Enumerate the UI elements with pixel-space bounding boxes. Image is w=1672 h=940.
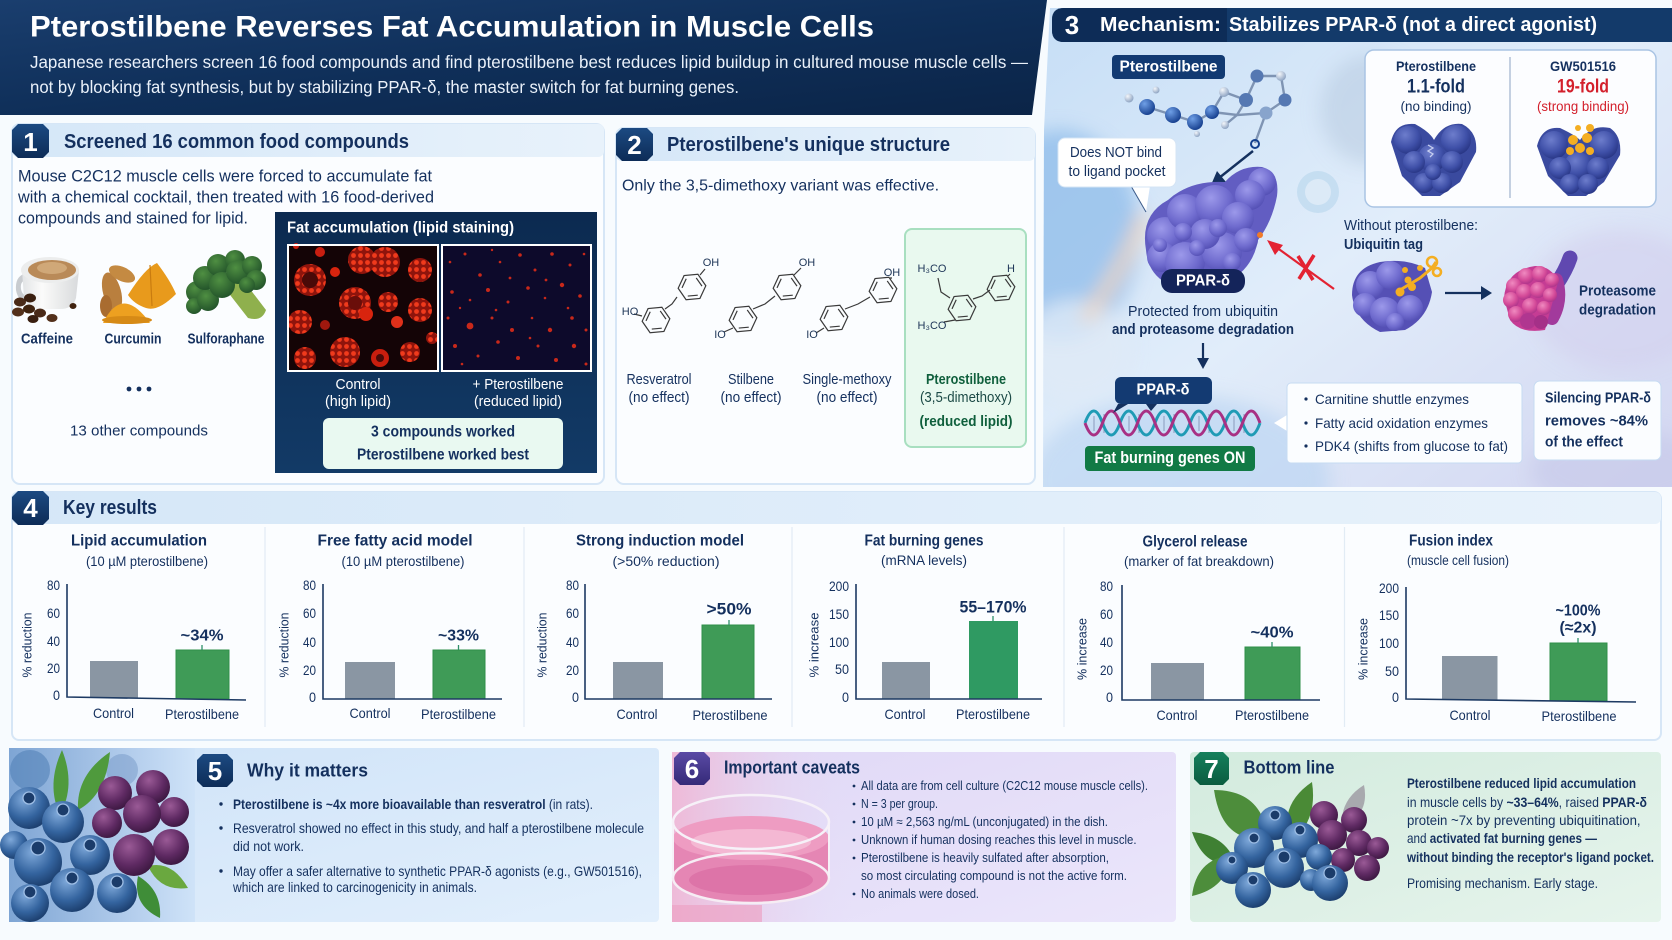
summary text [1406,775,1654,891]
protection caption: Protected from ubiquitin [1128,304,1278,320]
proteasome [1503,258,1570,331]
protein: strong binding [1537,124,1620,196]
GW501516 binding: 19-fold [1557,76,1609,98]
GW501516 binding [1537,58,1629,114]
chart: fat burning genes: % increase [806,612,822,678]
PPAR-delta gene tag [1113,377,1212,413]
arrow: to protein [1211,151,1253,185]
label: control: (high lipid) [325,394,391,410]
chart: fat burning genes: 50 [835,661,849,677]
label: resveratrol [626,372,692,406]
caveat list: 10 µM ≈ 2,563 ng/mL (unconjugated) in the dish. [861,815,1108,829]
summary text: and activated fat burning genes — [1407,830,1597,846]
label: pterostilbene: (reduced lipid) [920,414,1013,430]
chart: strong induction model: % reduction [534,612,550,678]
bullet list: which are linked to carcinogenicity in animals. [232,879,477,895]
panel 4: key results [12,491,1661,740]
chart: glycerol release [1074,534,1320,723]
icon: broccoli [186,250,266,319]
label: pterostilbene: (3,5-dimethoxy) [920,390,1012,406]
chart: glycerol release: 40 [1100,634,1113,650]
chart: fat burning genes: 200 [829,578,849,594]
panel 3: mechanism [980,8,1672,565]
chart: fat burning genes: 100 [829,634,849,650]
molecule: resveratrol: OH [703,257,719,269]
label: stilbene: (no effect) [720,390,782,406]
target gene list: PDK4 (shifts from glucose to fat) [1315,438,1508,454]
heading 3: Mechanism: [1100,14,1221,36]
lipid staining panel [275,212,597,473]
label: curcumin: Curcumin [104,330,162,348]
chart: glycerol release: 0 [1106,689,1113,705]
chart: glycerol release: Pterostilbene [1235,707,1309,723]
silencing callout: Silencing PPAR-δ [1545,390,1651,406]
silencing callout [1534,381,1661,460]
chart: fusion index: Fusion index [1409,532,1493,550]
caveat list: Unknown if human dosing reaches this level in muscle. [861,833,1136,847]
chart: fusion index [1356,532,1636,724]
intro text [17,166,434,228]
panel 3 header [1052,8,1672,42]
panel 6: caveats [672,752,1176,922]
protein: ubiquitin tagged [1352,257,1441,332]
pterostilbene tag: Pterostilbene [1120,58,1218,76]
chart: glycerol release: (marker of fat breakdown) [1124,553,1274,569]
label: control: Control [336,377,380,393]
chart: strong induction model: Pterostilbene [692,707,768,723]
protein: PPAR-delta [1145,167,1277,287]
protection caption: and proteasome degradation [1112,322,1294,338]
chart: fusion index: (muscle cell fusion) [1407,552,1509,568]
label: resveratrol: Resveratrol [626,372,692,388]
photo: culture dish [672,752,852,922]
chart: free fatty acid model: 60 [303,605,316,621]
GW501516 binding: (strong binding) [1537,98,1629,114]
pterostilbene tag [1112,55,1225,79]
badge 3: 3 [1065,10,1079,40]
header banner [0,0,1047,115]
callout: does not bind [1058,138,1176,212]
badge 1: 1 [23,127,38,157]
chart: fusion index: 200 [1379,580,1399,596]
chart: fat burning genes: 0 [842,689,849,705]
arrow: to proteasome [1445,286,1492,300]
molecule: stilbene [714,257,815,341]
subtitle: Japanese researchers screen 16 food compounds and find pterostilbene best reduces lipid buildup in cultured mouse muscle cells — [30,52,1028,72]
chart: glycerol release: 60 [1100,606,1113,622]
proteasome label [1579,282,1656,318]
molecule: single-methoxy: OH [884,267,900,279]
arrow: down to DNA [1197,343,1209,369]
chart: free fatty acid model: Free fatty acid model [318,532,472,550]
GW501516 binding: GW501516 [1550,58,1616,74]
heading 1: Screened 16 common food compounds [64,131,409,153]
badge 2: 2 [627,130,642,160]
chart: fat burning genes: 55–170% [960,598,1026,616]
binding comparison box [1365,50,1656,207]
fat burning genes label [1085,446,1255,471]
chart: strong induction model: >50% [706,600,752,618]
summary text: protein ~7x by preventing ubiquitination, [1407,812,1641,828]
arrow: blocked ubiquitination [1267,240,1334,289]
intro text: with a chemical cocktail, then treated with 16 food-derived [17,188,434,206]
PPAR-delta label: PPAR-δ [1176,272,1230,290]
panel 7: bottom line [1190,752,1661,922]
label: single-methoxy [802,372,892,406]
chart: lipid accumulation: Control [93,705,134,721]
chart: glycerol release: ~40% [1250,624,1294,642]
bullet list: did not work. [233,838,304,854]
without pterostilbene text [1344,218,1478,253]
molecule: pterostilbene: H [1007,263,1015,275]
summary text: Promising mechanism. Early stage. [1407,875,1598,891]
chart: strong induction model [534,532,772,723]
heading 5: Why it matters [247,760,368,780]
badge 7 [1194,752,1229,785]
label: single-methoxy: (no effect) [816,390,878,406]
lipid panel title: Fat accumulation (lipid staining) [287,220,514,236]
icon: coffee [12,257,79,323]
badge 5: 5 [208,756,222,786]
photo: berries [1192,782,1389,908]
ellipsis dots [127,387,151,391]
pterostilbene molecule model [1124,70,1292,148]
badge 4: 4 [23,493,38,523]
chart: fusion index: % increase [1356,618,1370,680]
intro text: Mouse C2C12 muscle cells were forced to accumulate fat [18,166,432,186]
molecule: single-methoxy [806,267,900,341]
caveat list: so most circulating compound is not the active form. [861,869,1127,883]
subtitle [30,52,1028,97]
photo: blueberries and grapes [0,748,195,922]
panel 1: screened compounds [12,124,604,484]
heading 3: Stabilizes PPAR-δ (not a direct agonist) [1229,14,1597,36]
chart: fat burning genes: 150 [829,606,849,622]
label: pterostilbene treated [472,377,564,410]
chart: glycerol release: 20 [1100,662,1113,678]
heading 6: Important caveats [724,756,860,778]
proteasome label: Proteasome [1579,282,1656,300]
bullet list: May offer a safer alternative to synthetic PPAR-δ agonists (e.g., GW501516), [233,863,642,879]
chart: lipid accumulation: (10 µM pterostilbene) [86,553,208,569]
chart: lipid accumulation: 0 [53,687,60,703]
heading 7: Bottom line [1244,756,1334,778]
chart: lipid accumulation: 60 [47,605,60,621]
chart: lipid accumulation [20,532,246,722]
badge 4 [12,491,49,525]
molecule: pterostilbene [918,263,1018,332]
chart: lipid accumulation: 80 [47,577,60,593]
without pterostilbene text: Ubiquitin tag [1344,237,1423,253]
chart: fat burning genes: Control [884,706,926,722]
protein: no binding [1391,124,1476,196]
chart: free fatty acid model: % reduction [276,612,292,678]
molecule: stilbene: IO [714,329,726,341]
chart: free fatty acid model: 0 [309,689,316,705]
bullet list: Resveratrol showed no effect in this study, and half a pterostilbene molecule [233,820,644,836]
chart: fat burning genes: (mRNA levels) [881,552,967,568]
chart: fusion index: 0 [1392,689,1399,705]
label: pterostilbene treated: (reduced lipid) [474,394,562,410]
micrograph: control [287,243,439,372]
chart: strong induction model: 20 [566,662,579,678]
caveat list: No animals were dosed. [861,887,979,901]
chart: lipid accumulation: Lipid accumulation [71,532,207,550]
pterostilbene binding: 1.1-fold [1407,76,1465,98]
PPAR-delta label [1161,269,1245,293]
chart: strong induction model: (>50% reduction) [612,553,720,569]
badge 1 [12,124,49,158]
pterostilbene binding: Pterostilbene [1396,58,1476,74]
caveat list: All data are from cell culture (C2C12 mouse muscle cells). [861,779,1148,793]
intro text: compounds and stained for lipid. [18,208,248,228]
result callout: Pterostilbene worked best [357,446,530,464]
chart: free fatty acid model: 80 [303,577,316,593]
micrograph: pterostilbene [441,244,592,372]
label: sulforaphane: Sulforaphane [188,330,264,348]
subtitle: not by blocking fat synthesis, but by stabilizing PPAR-δ, the master switch for fat burning genes. [30,77,739,97]
chart: strong induction model: Strong induction model [576,532,744,550]
chart: fat burning genes: Pterostilbene [956,706,1030,722]
result callout: 3 compounds worked [371,424,515,440]
silencing callout: removes ~84% [1545,412,1648,430]
label: control [325,377,391,410]
label: other compounds: 13 other compounds [70,422,208,440]
panel 2: structure [616,128,1035,484]
summary text: in muscle cells by ~33–64%, raised PPAR-δ [1407,794,1647,810]
chart: fusion index: (≈2x) [1560,620,1596,636]
title: Pterostilbene Reverses Fat Accumulation in Muscle Cells [30,10,874,44]
chart: fusion index: 100 [1379,635,1399,651]
chart: lipid accumulation: % reduction [20,612,34,678]
target gene list: Carnitine shuttle enzymes [1315,391,1469,407]
chart: glycerol release: 80 [1100,578,1113,594]
chart: strong induction model: Control [616,706,658,722]
molecule: single-methoxy: IO [806,329,818,341]
label: caffeine: Caffeine [21,330,73,348]
label: single-methoxy: Single-methoxy [802,372,892,388]
panel 5: why it matters [0,748,659,922]
label: stilbene [720,372,782,406]
molecule: resveratrol [622,257,719,338]
label: resveratrol: (no effect) [628,390,690,406]
chart: fat burning genes [806,532,1042,722]
caveat list: Pterostilbene is heavily sulfated after absorption, [861,851,1109,865]
chart: glycerol release: % increase [1074,618,1090,680]
chart: lipid accumulation: 40 [47,633,60,649]
chart: free fatty acid model: (10 µM pterostilbene) [342,553,464,569]
chart: fusion index: Control [1450,707,1490,723]
chart: fusion index: Pterostilbene [1542,708,1617,724]
DNA helix [1085,411,1260,435]
chart: strong induction model: 40 [566,634,579,650]
chart: strong induction model: 0 [572,689,579,705]
chart: free fatty acid model: Control [350,705,390,721]
chart: lipid accumulation: 20 [47,660,60,676]
heading 4: Key results [63,497,157,519]
badge 7: 7 [1204,754,1219,784]
label: pterostilbene: Pterostilbene [926,372,1006,388]
protection caption [1112,304,1294,338]
chart: free fatty acid model: 20 [303,662,316,678]
chart: fusion index: 150 [1379,607,1399,623]
caveat list: N = 3 per group. [861,797,938,811]
badge 6 [674,752,710,785]
chart: free fatty acid model: ~33% [438,628,479,644]
chart: glycerol release: Glycerol release [1142,534,1248,550]
molecule: pterostilbene: H₃CO [918,263,947,275]
target gene list [1274,383,1522,463]
label: pterostilbene treated: + Pterostilbene [472,377,564,393]
result callout [323,418,563,469]
chart: glycerol release: Control [1156,707,1198,723]
proteasome label: degradation [1579,302,1656,318]
chart: strong induction model: 80 [566,577,579,593]
silencing callout: of the effect [1545,434,1623,450]
bullet list: Pterostilbene is ~4x more bioavailable than resveratrol (in rats). [233,796,593,812]
badge 5 [197,754,233,787]
body text: Only the 3,5-dimethoxy variant was effective. [622,178,939,194]
fat burning genes label: Fat burning genes ON [1094,449,1246,467]
molecule: resveratrol: HO [622,306,639,318]
label: pterostilbene [920,372,1013,430]
label: stilbene: Stilbene [728,372,774,388]
highlight box [905,229,1026,447]
callout: does not bind: to ligand pocket [1068,164,1166,180]
chart: free fatty acid model [276,532,502,722]
bullet list [219,796,644,895]
pterostilbene binding: (no binding) [1400,98,1472,114]
chart: free fatty acid model: Pterostilbene [421,706,496,722]
without pterostilbene text: Without pterostilbene: [1344,218,1478,234]
icon: curcumin [98,262,176,324]
pterostilbene binding [1396,58,1476,114]
decorative cell bubble [1297,171,1339,213]
caveat list [853,779,1148,901]
badge 2 [616,128,653,161]
heading 2: Pterostilbene's unique structure [667,134,950,156]
PPAR-delta gene tag: PPAR-δ [1136,382,1190,398]
chart: fat burning genes: Fat burning genes [864,532,984,550]
chart: lipid accumulation: ~34% [180,628,224,644]
chart: fusion index: 50 [1385,663,1399,679]
chart: free fatty acid model: 40 [303,634,316,650]
chart: strong induction model: 60 [566,605,579,621]
chart: fusion index: ~100% [1556,602,1600,620]
molecule: stilbene: OH [799,257,815,269]
molecule: pterostilbene: H₃CO [918,320,947,332]
badge 6: 6 [685,754,699,784]
chart: lipid accumulation: Pterostilbene [165,706,239,722]
callout: does not bind: Does NOT bind [1070,145,1162,161]
target gene list: Fatty acid oxidation enzymes [1315,415,1488,431]
